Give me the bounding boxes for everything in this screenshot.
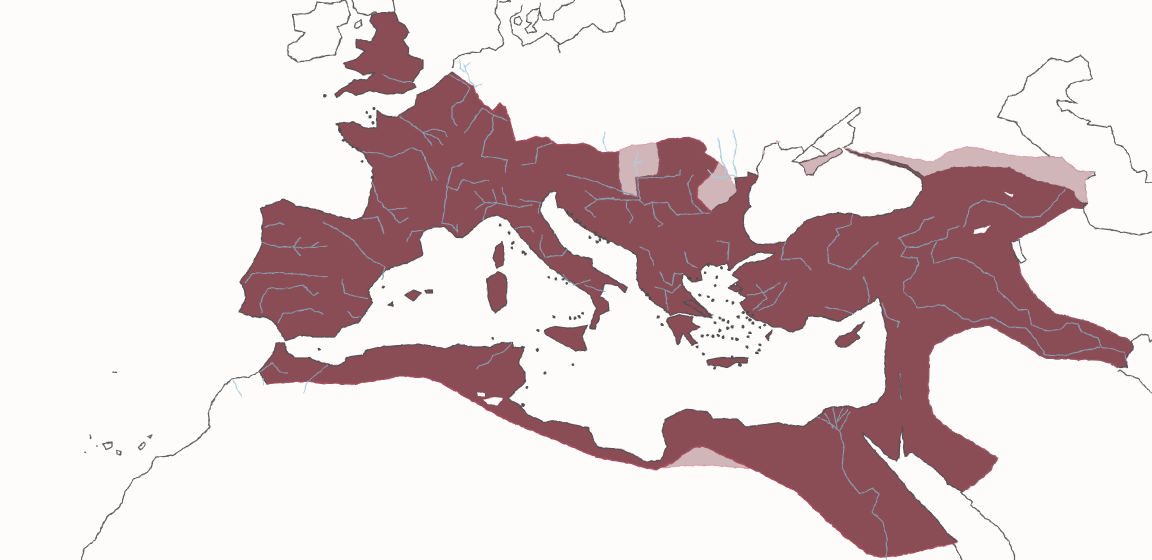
Rhodes and Lesbos (728, 285, 772, 340)
Canary Islands and Madeira (85, 372, 152, 455)
Euboea (683, 300, 712, 318)
Caucasus border (1050, 157, 1152, 235)
frontier edges (267, 75, 1129, 557)
rivers of Anatolia (748, 215, 878, 314)
river Thames (383, 75, 412, 82)
rivers of Italy (475, 187, 605, 292)
African wadis (233, 378, 308, 397)
Arabian coast (953, 492, 1014, 560)
small islands (319, 96, 765, 405)
northern rivers (603, 130, 737, 177)
Tigris (931, 243, 1127, 363)
Dead Sea and Gulf head (899, 373, 902, 400)
Dead Sea outline (899, 373, 902, 399)
Nile and delta (817, 408, 887, 560)
Sardinia (487, 272, 507, 313)
conquered provinces, light (618, 140, 1095, 469)
Sarmatia strip (843, 147, 1095, 204)
Chotts of Tunisia (477, 393, 503, 405)
rivers of the Balkans (640, 241, 729, 310)
Cyrenaica desert patch (657, 446, 752, 469)
Britain (335, 12, 423, 97)
Scottish loch (355, 20, 362, 28)
Danish island 2 (525, 8, 540, 33)
Low Countries and Germany coast (453, 0, 503, 68)
Lake Van (973, 224, 991, 234)
Black Sea north coast (757, 142, 804, 180)
Danish island (515, 17, 522, 25)
Persian Gulf east coast (1118, 334, 1152, 393)
Gulf of Corinth (683, 302, 705, 315)
Jutland and Baltic coast (500, 0, 625, 53)
Lake Sevan (1003, 191, 1013, 197)
Crete (708, 358, 748, 367)
rivers of Gaul (363, 75, 507, 241)
Ireland (288, 0, 350, 62)
Peloponnese (667, 315, 700, 345)
eastern frontier (924, 167, 1080, 202)
Sea of Azov (804, 107, 860, 154)
rivers over empire (245, 75, 1127, 560)
Crimea (799, 148, 843, 175)
Cyprus (835, 322, 864, 347)
northern frontier (456, 75, 618, 153)
rivers beyond the frontier (233, 60, 737, 397)
mainland empire (239, 72, 1133, 557)
small patches near the delta (762, 140, 781, 154)
Rhine delta (460, 60, 482, 87)
rivers in Dacia (635, 153, 737, 178)
West Africa coast (81, 371, 260, 560)
Lake Urmia (1010, 240, 1026, 263)
Mesopotamian frontier (928, 325, 1118, 491)
African frontier (267, 376, 955, 557)
Sweden coast (540, 0, 575, 20)
Corsica (493, 242, 504, 268)
Scotland (352, 0, 395, 15)
rivers of Iberia (245, 222, 385, 323)
rivers of the Levant (864, 277, 899, 327)
rivers of North Africa (260, 343, 512, 382)
Euphrates (899, 217, 1100, 355)
Caspian and Aral coast (998, 55, 1152, 183)
Dacia west (618, 143, 660, 196)
empire territory (239, 12, 1133, 557)
lakes (477, 191, 1013, 405)
Araxes (964, 189, 1065, 227)
Dacia east (697, 153, 737, 212)
Sicily (545, 325, 588, 351)
rivers of the Danube basin (522, 143, 710, 227)
Balearic Islands (388, 290, 432, 306)
Dacia frontier (618, 143, 660, 196)
